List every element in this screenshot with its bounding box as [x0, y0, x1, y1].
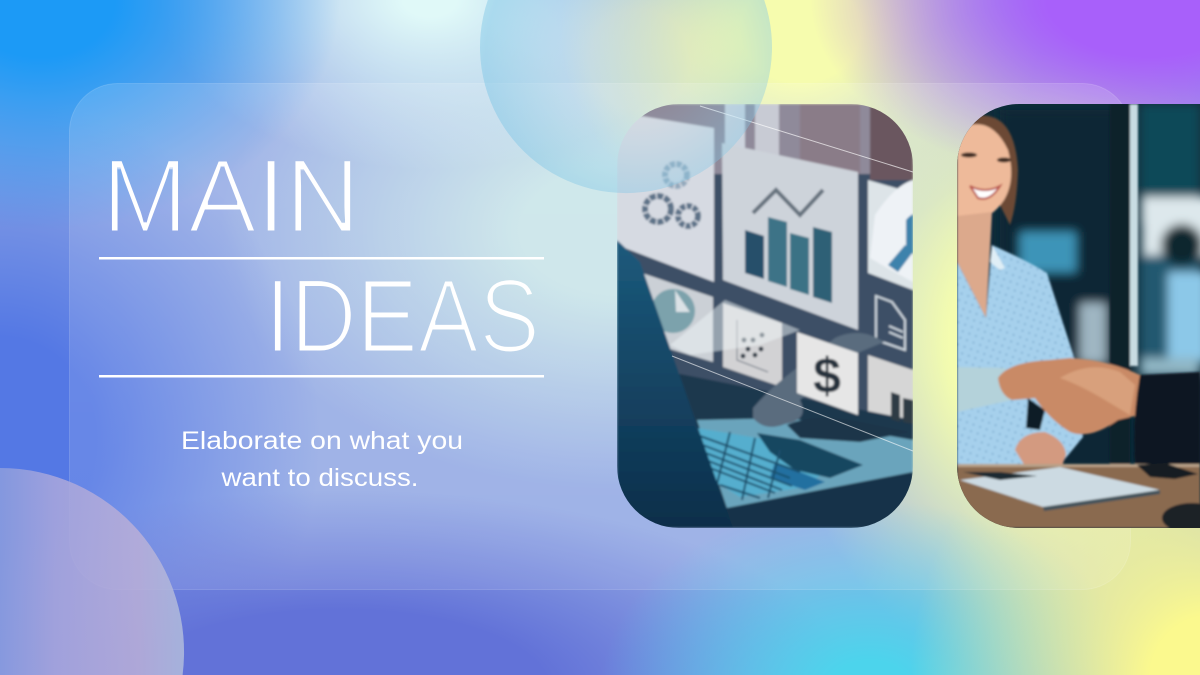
dashboard tile: line and bar chart: [722, 143, 858, 330]
bubble: top centre: [480, 0, 772, 193]
desk: [957, 464, 1200, 528]
sleeve: [957, 367, 1012, 412]
laptop dark deck: [678, 374, 913, 510]
icon: gears: [645, 164, 698, 226]
title word: IDEAS: IDEAS: [265, 258, 540, 375]
title word: MAIN: MAIN: [102, 138, 360, 255]
icon: scatter plot: [741, 333, 764, 358]
bars lower right: [891, 392, 900, 422]
dashboard tile: scatter: [723, 303, 782, 387]
divider bottom: [99, 375, 544, 378]
clasped hand: [1015, 432, 1066, 466]
icon: line chart: [753, 190, 823, 215]
dark gap below handshake: [1026, 398, 1045, 430]
dashboard tile: lower right: [866, 354, 913, 420]
laptop screen edge: [617, 240, 733, 528]
phone: [1137, 463, 1198, 479]
window frame: [1130, 104, 1138, 366]
eyes and smile: [961, 152, 1011, 199]
icon: bars: [745, 217, 832, 303]
curtain strip: [617, 104, 913, 180]
subtitle: want to discuss.: [220, 464, 418, 492]
bubble: bottom left: [0, 468, 184, 675]
clipboard: [960, 467, 1160, 507]
keyboard dark keys: [757, 433, 863, 478]
black suit sleeve: [1134, 372, 1200, 464]
dashboard tile: pie chart: [633, 270, 713, 362]
woman's shirt: [957, 245, 1083, 465]
arm and handshake: [998, 358, 1142, 434]
dashboard tile: gears: [617, 112, 714, 282]
icon: magnifier: [888, 245, 913, 272]
panel: frosted glass card: [70, 84, 1130, 590]
keyboard cyan keys: [697, 428, 830, 497]
dollar tile: [797, 332, 858, 415]
icon: pie chart: [651, 289, 695, 333]
divider top: [99, 257, 544, 260]
icon: dollar sign: $: [813, 348, 841, 404]
dark object on desk: [1162, 503, 1200, 533]
dashboard tile: top right: [868, 180, 913, 290]
icon: documents: [876, 296, 905, 350]
blurred office background: [1012, 104, 1200, 379]
subtitle: [181, 427, 463, 492]
subtitle: Elaborate on what you: [181, 427, 463, 455]
woman's face: [957, 124, 1011, 220]
pen: [963, 472, 1037, 480]
hand: [753, 333, 884, 427]
neck: [957, 212, 992, 318]
hand highlight: [870, 180, 913, 282]
photo: laptop with data dashboard: [617, 104, 913, 528]
woman's hair: [957, 115, 1018, 225]
laptop dark base: [726, 474, 910, 527]
laptop light deck: [697, 418, 913, 508]
photo: business handshake: [957, 104, 1200, 533]
translucent reflection: [670, 300, 800, 355]
title: [99, 138, 544, 378]
